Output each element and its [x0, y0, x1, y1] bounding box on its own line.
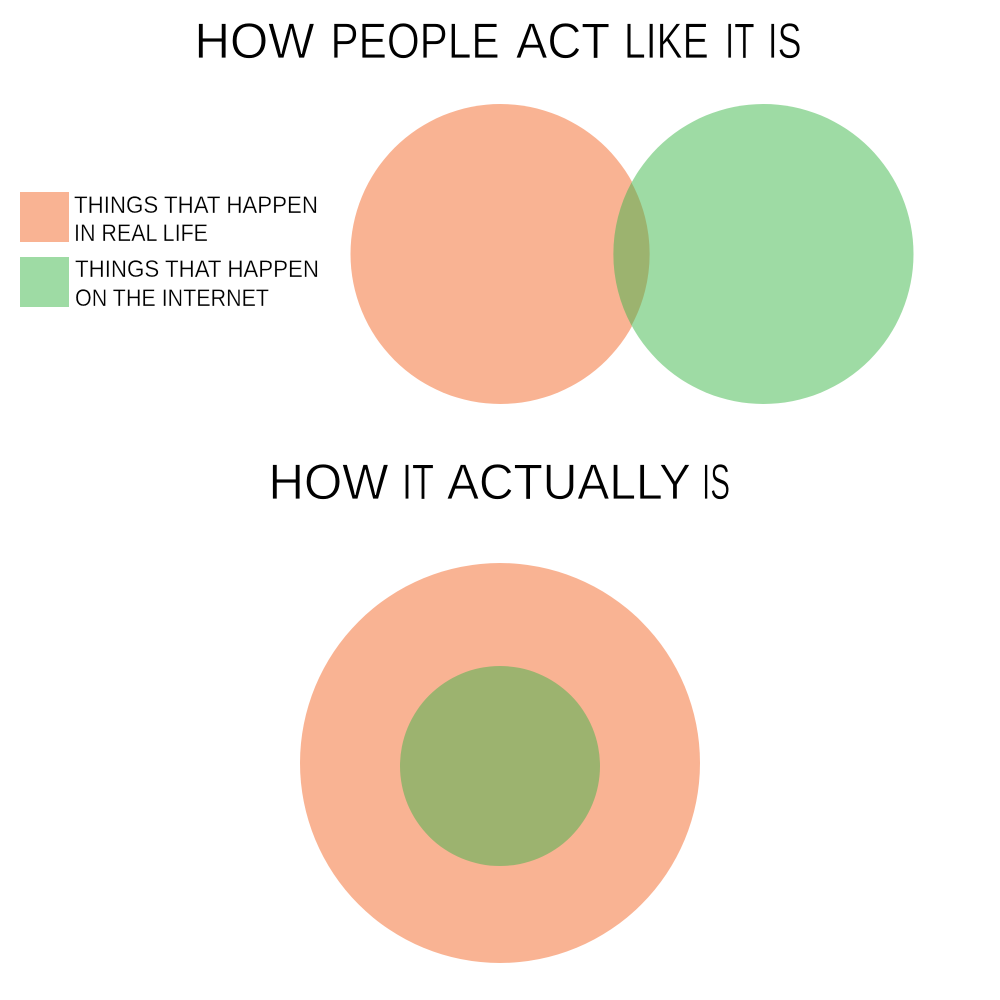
circle: real life: [300, 563, 700, 963]
legend label: real life: THINGS THAT HAPPEN: [74, 192, 318, 219]
title: how people act like it is: IS: [768, 13, 802, 69]
title: how people act like it is: HOW: [194, 13, 315, 69]
circle: real life: [350, 104, 650, 404]
title: how it actually is: ACTUALLY: [447, 454, 691, 510]
legend label: internet: ON THE INTERNET: [75, 285, 269, 312]
title: how people act like it is: IT: [725, 13, 755, 69]
legend swatch: real life: [20, 192, 69, 242]
title: how it actually is: IS: [702, 454, 730, 510]
legend: [20, 192, 319, 312]
legend swatch: internet: [20, 257, 69, 307]
circle: internet inside real life: [400, 666, 600, 866]
title: how people act like it is: PEOPLE: [330, 13, 500, 69]
circle: internet: [614, 104, 914, 404]
venn diagram: overlapping circles: [350, 104, 914, 404]
title: how it actually is: HOW: [268, 454, 389, 510]
title: how people act like it is: LIKE: [624, 13, 709, 69]
overlap region: [613, 182, 650, 326]
legend label: internet: THINGS THAT HAPPEN: [75, 256, 319, 283]
title: how it actually is: IT: [402, 454, 434, 510]
nested diagram: internet inside real life: [300, 563, 700, 963]
title: how people act like it is: ACT: [516, 13, 610, 69]
legend label: real life: IN REAL LIFE: [74, 220, 208, 247]
